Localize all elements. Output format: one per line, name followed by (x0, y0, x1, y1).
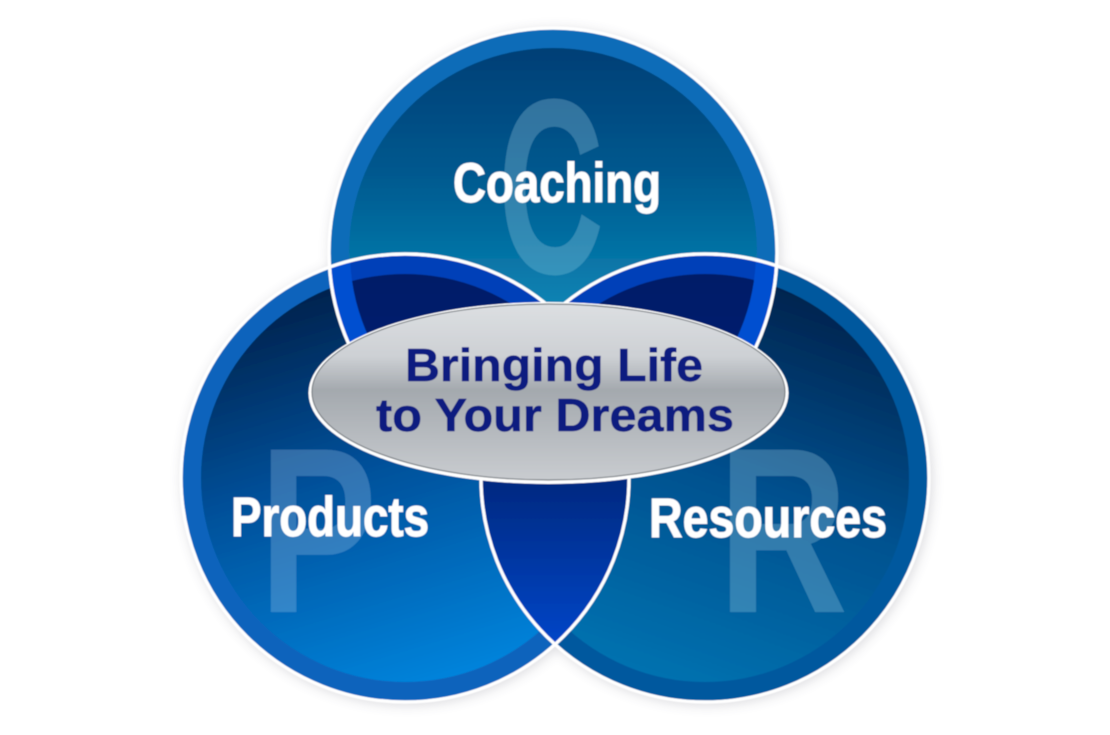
label: Resources: Resources (649, 486, 887, 549)
overlap: Products and Resources (482, 479, 628, 642)
white circle outlines (181, 28, 929, 702)
label: Coaching: Coaching (453, 151, 661, 214)
central oval (308, 302, 788, 484)
circle: Coaching (329, 28, 777, 476)
circle: Products (181, 254, 629, 702)
oval text line 1: Bringing Life (405, 339, 703, 391)
overlap: Coaching and Resources (570, 256, 775, 346)
diagram artwork (181, 28, 929, 702)
venn diagram (178, 24, 936, 710)
overlap: Coaching and Products (332, 256, 540, 342)
watermark letter C: C (498, 47, 604, 326)
drop shadow (182, 29, 932, 705)
watermark letter P: P (259, 399, 377, 663)
label: Products: Products (231, 485, 429, 548)
circle: Resources (481, 254, 929, 702)
watermark letter R: R (718, 399, 848, 663)
oval text line 2: to Your Dreams (376, 389, 734, 441)
